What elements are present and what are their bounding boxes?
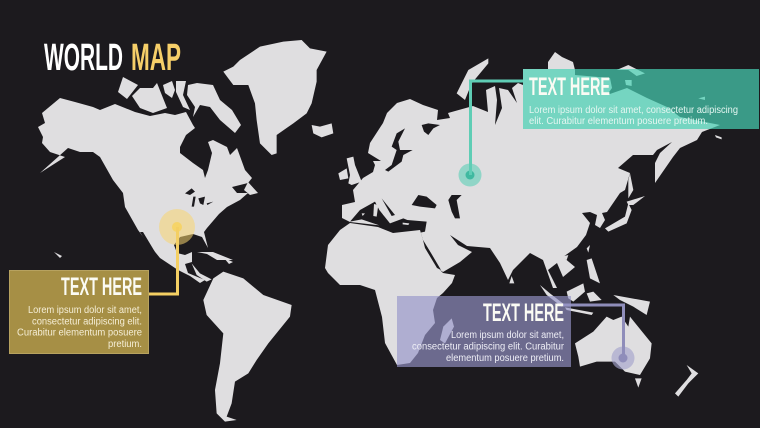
callout: southern africa: TEXT HERE <box>483 299 564 327</box>
asia pacific islands <box>440 258 698 397</box>
inland seas <box>350 123 462 235</box>
callout: southern africa <box>397 296 571 367</box>
title: MAP <box>131 37 181 79</box>
eurasia <box>342 52 720 288</box>
callout: southern africa: Lorem ipsum dolor sit amet, <box>451 330 564 341</box>
marker: australia <box>563 305 634 370</box>
callout: southern africa: elementum posuere pretium. <box>446 353 564 364</box>
callout: north america <box>10 270 148 354</box>
callout: north america: Lorem ipsum dolor sit amet, <box>28 305 142 316</box>
callout: russia: Lorem ipsum dolor sit amet, consectetur adipiscing <box>529 105 738 116</box>
marker: russia <box>458 81 523 186</box>
japan and far east islands <box>562 173 645 260</box>
marker: north america <box>148 209 195 294</box>
callout: north america: TEXT HERE <box>61 273 142 301</box>
callout: russia: elit. Curabitur elementum posuere pretium. <box>529 116 708 127</box>
callout: russia <box>523 69 759 129</box>
africa <box>325 223 455 365</box>
title: WORLD <box>44 37 123 79</box>
south america <box>192 263 292 422</box>
callout: north america: consectetur adipiscing elit. <box>32 316 142 328</box>
great lakes <box>185 188 213 207</box>
red sea <box>423 240 441 270</box>
callout: russia: TEXT HERE <box>529 73 610 101</box>
callout: north america: Curabitur elementum posuere <box>17 328 142 338</box>
europe islands <box>338 157 409 225</box>
greenland and iceland <box>223 40 333 155</box>
arctic islands <box>457 58 722 139</box>
callout: southern africa: consectetur adipiscing elit. Curabitur <box>412 342 565 352</box>
callout: north america: pretium. <box>108 339 142 350</box>
north america <box>38 77 258 283</box>
